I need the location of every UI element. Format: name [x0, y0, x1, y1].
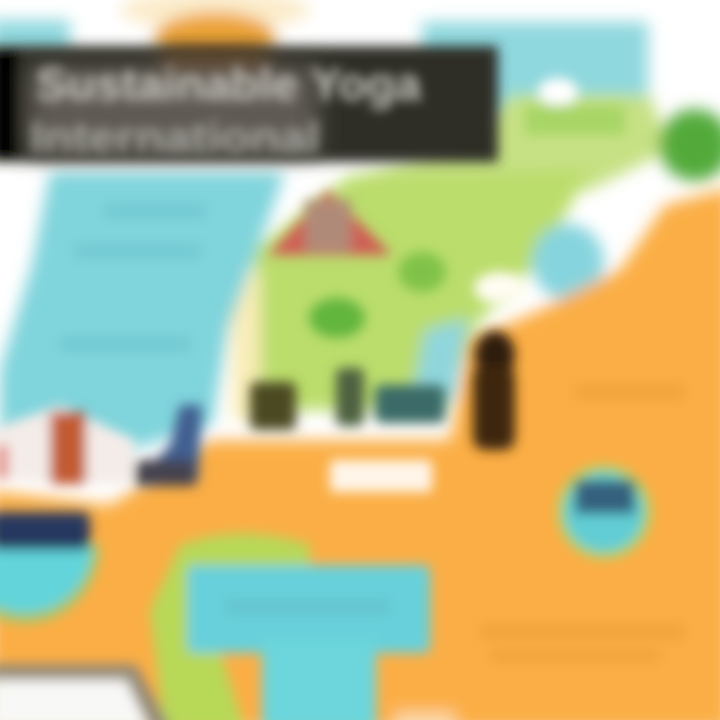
grey corner card [0, 664, 172, 720]
sky panel [422, 22, 648, 112]
icon: barn tent [268, 190, 392, 255]
cream left edge of green [232, 270, 260, 420]
title: Sustainable Yoga [36, 58, 421, 110]
icon: white blob by pond [474, 272, 526, 304]
big blue panel [0, 172, 285, 450]
orange ground [0, 188, 720, 720]
stream [412, 318, 468, 400]
icon: green marks [309, 252, 446, 338]
white label [330, 460, 432, 492]
title bar [0, 46, 498, 162]
icon: people row [250, 368, 445, 430]
icon: blue figure [135, 405, 202, 486]
title shading [28, 50, 318, 154]
sky strip left [0, 20, 70, 56]
icon: house on hill [525, 78, 625, 135]
green arc and strip [150, 534, 310, 720]
icon: standing figure [473, 331, 515, 450]
icon: white tent left [0, 405, 135, 485]
title [30, 58, 421, 162]
peach corner [395, 712, 455, 720]
blue panel captions [60, 205, 205, 350]
title: International [30, 113, 320, 162]
sun [120, 0, 310, 64]
teal signpost panel [187, 565, 430, 720]
pond [532, 224, 604, 300]
orange panel captions [480, 385, 685, 662]
teal panel caption [225, 600, 390, 614]
circle badge left [0, 512, 100, 623]
green hills [255, 95, 720, 410]
faint captions [60, 205, 685, 662]
circle badge right [557, 465, 651, 559]
